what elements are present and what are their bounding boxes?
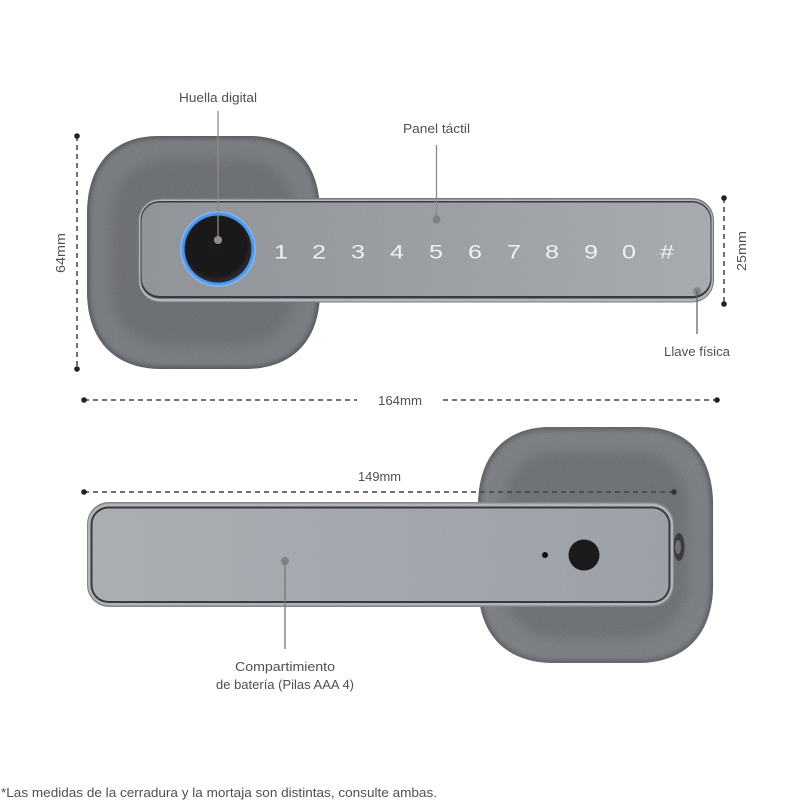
touch keypad digits: 5 bbox=[429, 242, 443, 264]
dimension: height 64mm: 64mm bbox=[54, 233, 68, 273]
touch keypad digits: 8 bbox=[545, 242, 559, 264]
callout: physical key bbox=[664, 287, 730, 359]
dimension: total width 164mm bbox=[81, 394, 720, 408]
touch keypad digits bbox=[274, 242, 675, 264]
dimension: handle length 149mm bbox=[81, 470, 677, 495]
dimension: total width 164mm: 164mm bbox=[378, 394, 422, 408]
footnote: *Las medidas de la cerradura y la mortaja son distintas, consulte ambas. bbox=[1, 786, 437, 800]
handle, rear view bbox=[87, 502, 674, 607]
small indicator hole bbox=[542, 552, 548, 558]
dimension: height 64mm bbox=[54, 133, 80, 372]
callout: battery compartment: Compartimiento bbox=[235, 660, 335, 674]
touch keypad digits: 4 bbox=[390, 242, 405, 264]
touch keypad digits: 3 bbox=[351, 242, 365, 264]
callout: touch panel: Panel táctil bbox=[403, 122, 470, 136]
touch keypad digits: 0 bbox=[622, 242, 636, 264]
touch keypad digits: 9 bbox=[584, 242, 598, 264]
dimension: handle height 25mm: 25mm bbox=[735, 231, 749, 271]
fingerprint sensor bbox=[180, 211, 256, 287]
lock front view bbox=[87, 136, 714, 369]
screw bbox=[674, 533, 684, 561]
back plate, rear view bbox=[478, 427, 713, 663]
callout: battery compartment: de batería (Pilas AAA 4) bbox=[216, 678, 354, 692]
callout: physical key: Llave física bbox=[664, 345, 730, 359]
touch keypad digits: 6 bbox=[468, 242, 482, 264]
lock back view bbox=[87, 427, 713, 663]
callout: fingerprint bbox=[179, 91, 257, 244]
back plate, front view bbox=[87, 136, 320, 369]
callout: battery compartment bbox=[216, 557, 354, 692]
dimension: handle length 149mm: 149mm bbox=[358, 470, 401, 484]
callout: fingerprint: Huella digital bbox=[179, 91, 257, 105]
fingerprint sensor rear / key hole bbox=[568, 540, 600, 570]
touch keypad digits: 1 bbox=[274, 242, 288, 264]
handle, front view bbox=[138, 198, 714, 302]
touch keypad digits: 2 bbox=[312, 242, 326, 264]
touch keypad digits: # bbox=[660, 242, 675, 264]
callout: touch panel bbox=[403, 122, 470, 224]
touch keypad digits: 7 bbox=[507, 242, 521, 264]
dimension: handle height 25mm bbox=[721, 195, 749, 307]
